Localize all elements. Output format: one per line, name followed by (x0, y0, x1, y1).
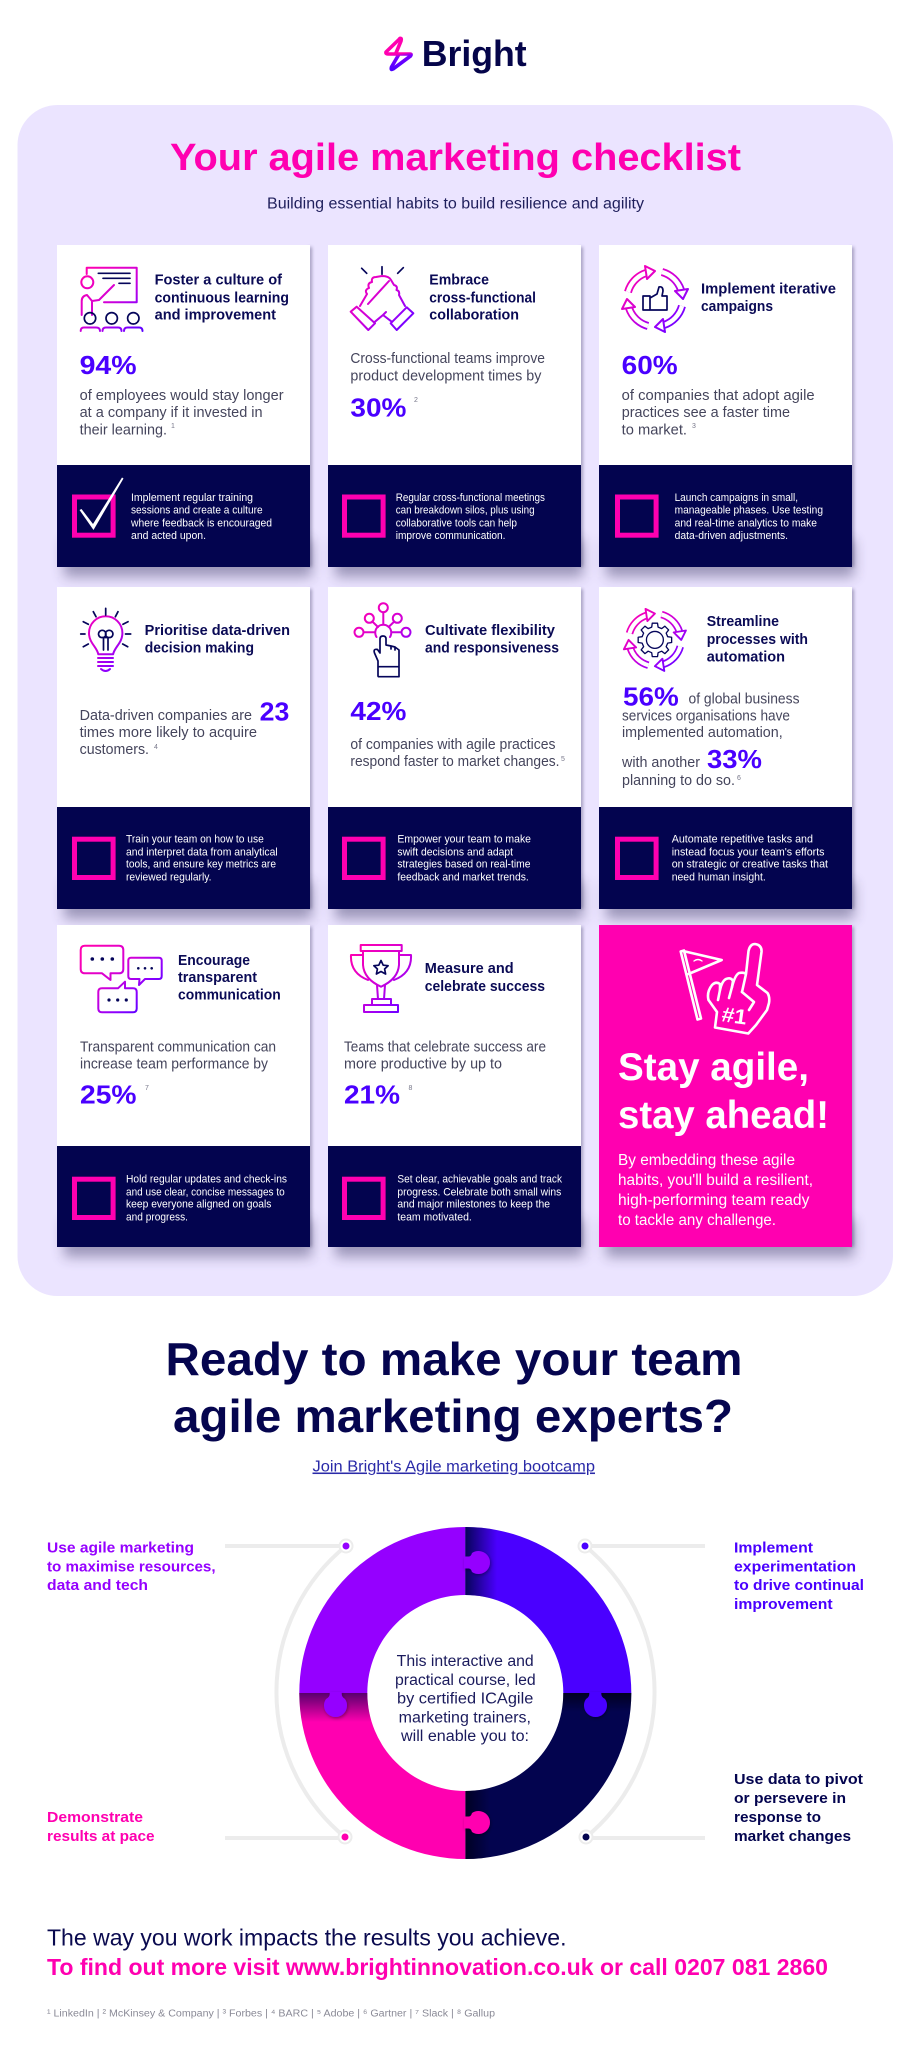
heading: decision making (145, 641, 254, 657)
body text with stat 23: 4 (154, 744, 158, 751)
body text: 3 (692, 423, 696, 430)
stat 42%: 42% (350, 696, 406, 726)
card body (599, 245, 852, 465)
action text: Hold regular updates and check-ins (126, 1174, 287, 1186)
body text: of employees would stay longer (80, 388, 284, 404)
action text: feedback and market trends. (397, 871, 529, 883)
action text: manageable phases. Use testing (675, 505, 823, 517)
link: bootcamp: Join Bright's Agile marketing bootcamp (312, 1458, 595, 1476)
action text: Train your team on how to use (126, 834, 264, 846)
stat 25%: 7 (145, 1085, 149, 1092)
icon: lightning bolt (386, 38, 411, 69)
label: use data to pivot: response to (734, 1809, 821, 1826)
segment: pink (299, 1693, 465, 1859)
action panel (328, 465, 581, 567)
checkbox (74, 839, 113, 878)
stat 60%: 60% (622, 350, 678, 380)
action text: reviewed regularly. (126, 871, 212, 883)
action text: Automate repetitive tasks and (672, 834, 813, 846)
action text: keep everyone aligned on goals (126, 1199, 272, 1211)
body text: increase team performance by (80, 1057, 269, 1073)
centre text: marketing trainers, (399, 1709, 531, 1726)
action text: on strategic or creative tasks that (672, 859, 829, 871)
action text: collaborative tools can help (396, 517, 517, 529)
body text: to market. (622, 422, 687, 438)
body text with stats 56% and 33% (621, 682, 800, 789)
label: implement experimentation: Implement (734, 1539, 813, 1556)
action text: instead focus your team's efforts (672, 846, 825, 858)
body text (344, 1040, 546, 1073)
card: Streamline processes with automation (599, 587, 852, 909)
heading (707, 614, 808, 666)
connector dots (338, 1540, 592, 1844)
callout heading: Stay agile, (618, 1046, 809, 1089)
action text (397, 834, 531, 883)
heading: processes with (707, 632, 808, 648)
body text with stats 56% and 33%: services organisations have (622, 708, 790, 724)
stat 25%: 25% (80, 1080, 136, 1110)
body text: product development times by (350, 368, 542, 384)
card: Stay agile, stay ahead (599, 925, 852, 1247)
label: use data to pivot: market changes (734, 1828, 851, 1845)
action text (396, 492, 545, 542)
body text (80, 388, 284, 438)
action text (126, 834, 278, 883)
card body (57, 587, 310, 807)
body text (622, 388, 815, 438)
card body (57, 245, 310, 465)
label: use data to pivot (734, 1771, 863, 1845)
logo: Bright (386, 33, 527, 74)
icon: iterative arrows with thumb (622, 266, 688, 332)
heading: continuous learning (155, 290, 289, 306)
body text: Cross-functional teams improve (350, 351, 545, 367)
action text: Implement regular training (131, 492, 253, 504)
segment: navy (465, 1693, 631, 1859)
label: use agile marketing: Use agile marketing (47, 1539, 194, 1556)
body text with stat 23: customers. (80, 742, 149, 758)
action text (126, 1174, 287, 1223)
icon: handshake (351, 267, 413, 330)
checkbox (74, 1179, 113, 1218)
body text (350, 737, 565, 770)
body text with stats 56% and 33%: planning to do so. (622, 773, 735, 789)
heading (429, 272, 536, 324)
action text (397, 1174, 562, 1223)
icon: foam finger and flag (681, 944, 769, 1034)
heading: Measure and (425, 961, 514, 977)
callout text: By embedding these agile (618, 1152, 795, 1169)
action panel (328, 1146, 581, 1247)
body text: 5 (561, 756, 565, 763)
footer call to action: To find out more visit www.brightinnovation.co.uk or call 0207 081 2860 (47, 1954, 828, 1980)
diagram: puzzle donut (225, 1527, 705, 1859)
card body (328, 245, 581, 465)
heading: and responsiveness (425, 641, 559, 657)
action text: Set clear, achievable goals and track (397, 1174, 562, 1186)
checkbox (344, 839, 383, 878)
action text (130, 492, 272, 542)
card: Prioritise data-driven decision making (57, 587, 310, 909)
action panel (599, 807, 852, 909)
icon: trophy (351, 945, 411, 1012)
sources: ¹ LinkedIn | ² McKinsey & Company | ³ Forbes | ⁴ BARC | ⁵ Adobe | ⁶ Gartner | ⁷ Slack | ⁸ Gallup (47, 2009, 495, 2020)
action text: team motivated. (397, 1211, 472, 1223)
heading: Cultivate flexibility (425, 623, 555, 639)
subtitle: Building essential habits to build resilience and agility (267, 196, 644, 212)
checkbox (618, 497, 656, 535)
action panel (328, 807, 581, 909)
action text: need human insight. (672, 871, 766, 883)
callout text: high-performing team ready (618, 1192, 810, 1209)
action panel (57, 807, 310, 909)
label: use data to pivot: or persevere in (734, 1790, 846, 1807)
label: implement experimentation: experimentation (734, 1558, 856, 1575)
card: Foster a culture (57, 245, 310, 567)
action text: can breakdown silos, plus using (396, 505, 535, 517)
body text with stats 56% and 33%: implemented automation, (622, 725, 783, 741)
heading (178, 953, 281, 1003)
connector lines (225, 1546, 705, 1838)
stat 21%: 8 (408, 1085, 412, 1092)
action text (672, 834, 829, 883)
action text: improve communication. (396, 530, 506, 542)
centre text: by certified ICAgile (397, 1691, 533, 1708)
callout text (618, 1152, 813, 1229)
action panel (57, 1146, 310, 1247)
stat 94%: 94% (80, 350, 137, 380)
action text: Empower your team to make (397, 834, 531, 846)
icon: hand tapping network (354, 603, 410, 677)
action text: sessions and create a culture (131, 505, 263, 517)
checkbox (344, 1179, 383, 1218)
action text: where feedback is encouraged (130, 517, 272, 529)
heading (425, 961, 545, 995)
heading: and improvement (155, 308, 276, 324)
heading: ready to make your team: Ready to make your team (166, 1333, 742, 1385)
logo wordmark: Bright (422, 33, 527, 74)
body text with stats 56% and 33%: 56% (623, 682, 679, 712)
icon: light bulb (81, 608, 131, 671)
label: demonstrate results: Demonstrate (47, 1809, 143, 1826)
icon: foam finger and flag: #1 (720, 1003, 749, 1030)
heading (155, 272, 289, 324)
centre text: practical course, led (395, 1672, 536, 1689)
body text (350, 351, 545, 384)
body text with stat 23 (80, 697, 289, 758)
checkbox ticked (74, 478, 124, 535)
segment: blue (465, 1527, 631, 1693)
footer statement: The way you work impacts the results you achieve. (47, 1925, 566, 1951)
panel: agile marketing checklist (18, 105, 893, 1296)
card: Implement iterative campaigns (599, 245, 852, 567)
heading: automation (707, 650, 785, 666)
heading: campaigns (701, 299, 773, 315)
body text with stats 56% and 33%: 33% (707, 744, 762, 774)
action text: tools, and ensure key metrics are (126, 859, 276, 871)
callout text: to tackle any challenge. (618, 1212, 776, 1229)
action text: data-driven adjustments. (675, 530, 788, 542)
centre text: will enable you to: (400, 1728, 529, 1745)
heading: ready to make your team: agile marketing experts? (173, 1390, 733, 1442)
action text: Launch campaigns in small, (675, 492, 798, 504)
action text: and progress. (126, 1211, 188, 1223)
action text: progress. Celebrate both small wins (397, 1186, 562, 1198)
body text: of companies that adopt agile (622, 388, 815, 404)
icon: gear with arrows (624, 609, 686, 671)
label: implement experimentation (734, 1539, 864, 1613)
heading: celebrate success (425, 979, 545, 995)
heading: communication (178, 987, 281, 1003)
callout heading: stay ahead! (618, 1094, 829, 1137)
icon: speech bubbles (81, 946, 162, 1012)
action panel (599, 465, 852, 567)
card: Encourage transparent communication (57, 925, 310, 1247)
body text: of companies with agile practices (350, 737, 556, 753)
body text with stats 56% and 33%: of global business (688, 691, 800, 707)
body text (80, 1040, 276, 1073)
heading: collaboration (429, 308, 519, 324)
action text: and interpret data from analytical (126, 846, 278, 858)
puzzle tabs (324, 1551, 607, 1834)
label: demonstrate results: results at pace (47, 1828, 155, 1845)
label: implement experimentation: improvement (734, 1596, 833, 1613)
callout heading (618, 1046, 829, 1137)
label: use data to pivot: Use data to pivot (734, 1771, 863, 1788)
body text: their learning. (80, 422, 167, 438)
panel background (18, 105, 893, 1296)
body text with stats 56% and 33%: with another (621, 755, 700, 771)
heading: Streamline (707, 614, 779, 630)
heading: transparent (178, 970, 257, 986)
action panel (57, 465, 310, 567)
pink background (599, 925, 852, 1247)
callout text: habits, you'll build a resilient, (618, 1172, 813, 1189)
label: implement experimentation: to drive continual (734, 1577, 864, 1594)
body text with stat 23: Data-driven companies are (80, 708, 252, 724)
body text: more productive by up to (344, 1057, 502, 1073)
title: Your agile marketing checklist (170, 137, 741, 179)
heading: ready to make your team (166, 1333, 742, 1442)
body text with stat 23: times more likely to acquire (80, 725, 257, 741)
heading: Prioritise data-driven (145, 623, 290, 639)
body text: at a company if it invested in (80, 405, 263, 421)
card: Cultivate flexibility and responsiveness (328, 587, 581, 909)
card: Embrace cross-functional collaboration (328, 245, 581, 567)
label: use agile marketing: data and tech (47, 1577, 148, 1594)
action text: and major milestones to keep the (397, 1199, 550, 1211)
body text: respond faster to market changes. (350, 754, 560, 770)
body text with stats 56% and 33%: 6 (737, 775, 741, 782)
label: use agile marketing (47, 1539, 216, 1594)
icon: presentation (81, 268, 142, 331)
checkbox (344, 497, 383, 535)
action text: and real-time analytics to make (675, 517, 817, 529)
body text: Transparent communication can (80, 1040, 276, 1056)
centre text (395, 1653, 536, 1745)
action text: Regular cross-functional meetings (396, 492, 545, 504)
card: Measure and celebrate success (328, 925, 581, 1247)
label: use agile marketing: to maximise resources, (47, 1558, 216, 1575)
centre text: This interactive and (397, 1653, 534, 1670)
card body (57, 925, 310, 1146)
heading (701, 281, 836, 315)
body text: Teams that celebrate success are (344, 1040, 546, 1056)
heading (425, 623, 559, 657)
action text: and use clear, concise messages to (126, 1186, 285, 1198)
stat 21%: 21% (344, 1080, 400, 1110)
heading: Encourage (178, 953, 250, 969)
heading: Implement iterative (701, 281, 836, 297)
heading (145, 623, 290, 657)
heading: cross-functional (429, 290, 536, 306)
action text: swift decisions and adapt (397, 846, 514, 858)
label: demonstrate results (47, 1809, 155, 1845)
body text: 1 (171, 423, 175, 430)
stat 30%: 30% (350, 392, 406, 422)
action text: strategies based on real-time (397, 859, 530, 871)
body text with stat 23: 23 (260, 697, 289, 727)
checkbox (618, 839, 656, 878)
heading: Foster a culture of (155, 272, 282, 288)
body text: practices see a faster time (622, 405, 790, 421)
card body (328, 925, 581, 1146)
segment: purple (299, 1527, 465, 1693)
action text: and acted upon. (131, 530, 206, 542)
action text (675, 492, 823, 542)
card body (328, 587, 581, 807)
card body (599, 587, 852, 807)
heading: Embrace (429, 272, 489, 288)
stat 30%: 2 (414, 397, 418, 404)
